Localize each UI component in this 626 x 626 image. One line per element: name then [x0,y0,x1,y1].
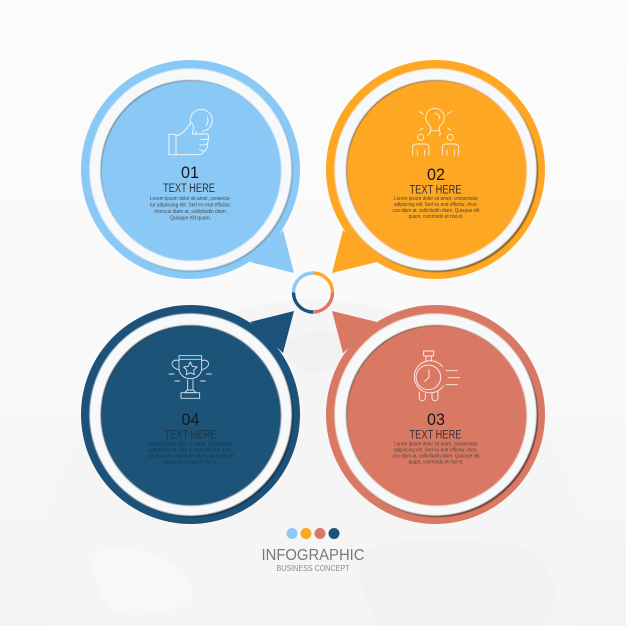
center ring [294,273,332,312]
ring with shadow [334,314,538,517]
body text: rhoncus diam at, sollicitudin diam. [154,209,227,215]
icon: two people with light bulb [413,108,459,155]
body text: adipiscing elit. Sed eu erat efficitur, rhon- [394,202,478,208]
number 04: 04 [182,410,200,429]
body text: quam, commodo et nisi et. [408,214,464,220]
body text [392,442,480,466]
icon: stopwatch with speed lines [414,351,460,401]
panel 03: salmon speech bubble [326,305,545,524]
body text: quam, commodo et nisi et. [163,460,218,466]
body text [392,196,480,220]
body text: Lorem ipsum dolor sit amet, consectetur [394,196,478,202]
body text: cus diam at, sollicitudin diam. Quisque elit [392,454,480,460]
body text: Quisque elit quam. [170,216,211,222]
body text: quam, commodo et nisi et. [408,460,464,466]
icon: trophy with star [169,356,211,398]
icon: thumbs up hand with coin [169,109,212,155]
body text: Lorem ipsum dolor sit amet, consecte- [150,196,231,202]
body text: cus diam at, sollicitudin diam. Quisque elit [392,208,480,214]
heading: TEXT HERE [163,183,215,195]
panel 02: orange speech bubble [326,60,545,279]
body text: Lorem ipsum dolor sit amet, consectetur [394,442,478,448]
body text [150,196,231,222]
body text: adipiscing elit. Sed eu erat efficitur, rhon- [148,448,233,454]
subtitle: BUSINESS CONCEPT [276,564,350,573]
number 02: 02 [427,165,445,184]
bubble shape [326,60,545,279]
background globe [43,299,583,626]
body text: cus diam at, sollicitudin diam. Quisque elit [147,454,234,460]
ring with shadow [90,314,293,517]
body text: Lorem ipsum dolor sit amet, consectetur [148,442,233,448]
body text: adipiscing elit. Sed eu erat efficitur, rhon- [394,448,478,454]
heading: TEXT HERE [164,430,217,442]
heading: TEXT HERE [410,430,462,442]
bubble shape [81,305,300,524]
panel 01: light blue speech bubble [81,60,300,279]
title: INFOGRAPHIC [262,547,364,564]
number 01: 01 [181,163,199,182]
legend dots [286,528,340,539]
body text: tur adipiscing elit. Sed eu erat efficitur, [150,202,231,208]
panel 04: navy speech bubble [81,305,300,524]
ring with shadow [334,68,538,272]
body text [147,442,234,466]
number 03: 03 [427,410,445,429]
ring with shadow [90,68,293,272]
bubble shape [81,60,300,279]
bubble shape [326,305,545,524]
heading: TEXT HERE [410,184,462,196]
